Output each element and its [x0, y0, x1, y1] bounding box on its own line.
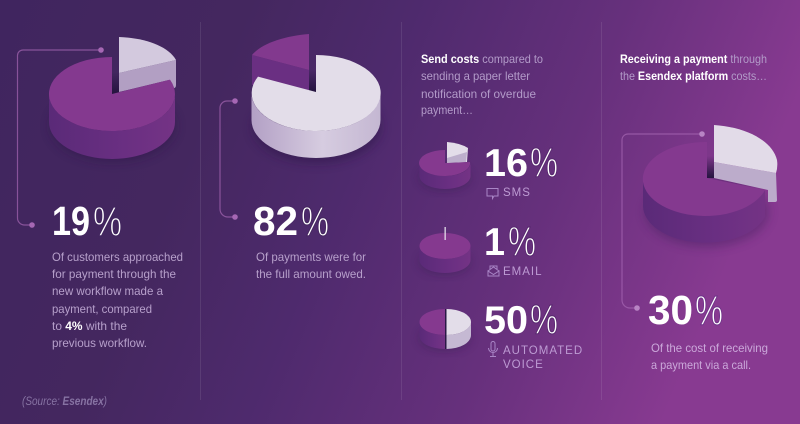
- stat: 30%: [648, 287, 723, 334]
- stat: 50%: %: [530, 296, 558, 343]
- description: a payment via a call.: [651, 358, 751, 372]
- stat: 16%: %: [530, 139, 558, 186]
- icon: envelope: [488, 266, 499, 276]
- stat: 82%: 82: [253, 198, 298, 244]
- connector line: [18, 47, 104, 228]
- pie chart: email: [420, 227, 470, 274]
- stat: 82%: %: [301, 198, 329, 245]
- label: email: EMAIL: [503, 266, 543, 278]
- source note: (Source: Esendex): [22, 394, 107, 408]
- description: Of the cost of receiving: [651, 341, 768, 355]
- description: [52, 250, 183, 350]
- description: for payment through the: [52, 267, 176, 281]
- panel: receiving a payment: [620, 52, 777, 372]
- description: to 4% with the: [52, 319, 127, 333]
- heading: receiving a payment: Receiving a payment through: [620, 52, 767, 66]
- stat: 1%: 1: [484, 221, 505, 264]
- stat: 16%: 16: [484, 142, 528, 185]
- stat: 1%: [484, 218, 536, 265]
- label: SMS: SMS: [503, 187, 531, 199]
- label: automated voice: AUTOMATED: [503, 345, 583, 357]
- label: automated voice: [503, 345, 583, 371]
- heading: receiving a payment: the Esendex platform costs…: [620, 69, 767, 83]
- description: Of customers approached: [52, 250, 183, 264]
- stat: 16%: [484, 139, 558, 186]
- panel: send costs: [419, 52, 583, 371]
- description: payment, compared: [52, 302, 152, 316]
- connector line: [220, 98, 238, 220]
- stat: 50%: [484, 296, 558, 343]
- stat: 82%: [253, 198, 329, 245]
- description: [256, 250, 366, 281]
- pie chart: voice: [420, 309, 471, 350]
- heading: send costs: Send costs compared to: [421, 52, 543, 66]
- pie chart: SMS: [419, 142, 470, 190]
- heading: send costs: payment…: [421, 103, 473, 117]
- pie chart: 19 percent: [49, 37, 176, 162]
- heading: send costs: sending a paper letter: [421, 69, 530, 83]
- pie chart: 82 percent: [252, 34, 381, 163]
- row: SMS 16%: [419, 139, 558, 199]
- description: previous workflow.: [52, 336, 147, 350]
- stat: 19%: 19: [52, 198, 90, 244]
- description: new workflow made a: [52, 284, 163, 298]
- stat: 30%: 30: [648, 287, 693, 333]
- panel: 82% payments: [220, 34, 381, 281]
- panel: 19% customers: [18, 37, 183, 350]
- icon: microphone: [488, 342, 498, 356]
- heading: send costs: notification of overdue: [421, 87, 536, 101]
- row: email 1%: [420, 218, 543, 278]
- heading: receiving a payment: [620, 52, 767, 83]
- description: Of payments were for: [256, 250, 366, 264]
- label: automated voice: VOICE: [503, 359, 544, 371]
- stat: 19%: %: [93, 198, 122, 245]
- description: [651, 341, 768, 372]
- description: the full amount owed.: [256, 267, 366, 281]
- stat: 1%: %: [508, 218, 536, 265]
- row: automated voice 50%: [420, 296, 583, 371]
- icon: speech bubble: [487, 188, 498, 198]
- heading: send costs: [421, 52, 543, 117]
- stat: 50%: 50: [484, 299, 528, 342]
- connector line: [622, 131, 705, 311]
- stat: 30%: %: [695, 287, 723, 334]
- pie chart: 30 percent: [643, 125, 777, 247]
- stat: 19%: [52, 198, 122, 245]
